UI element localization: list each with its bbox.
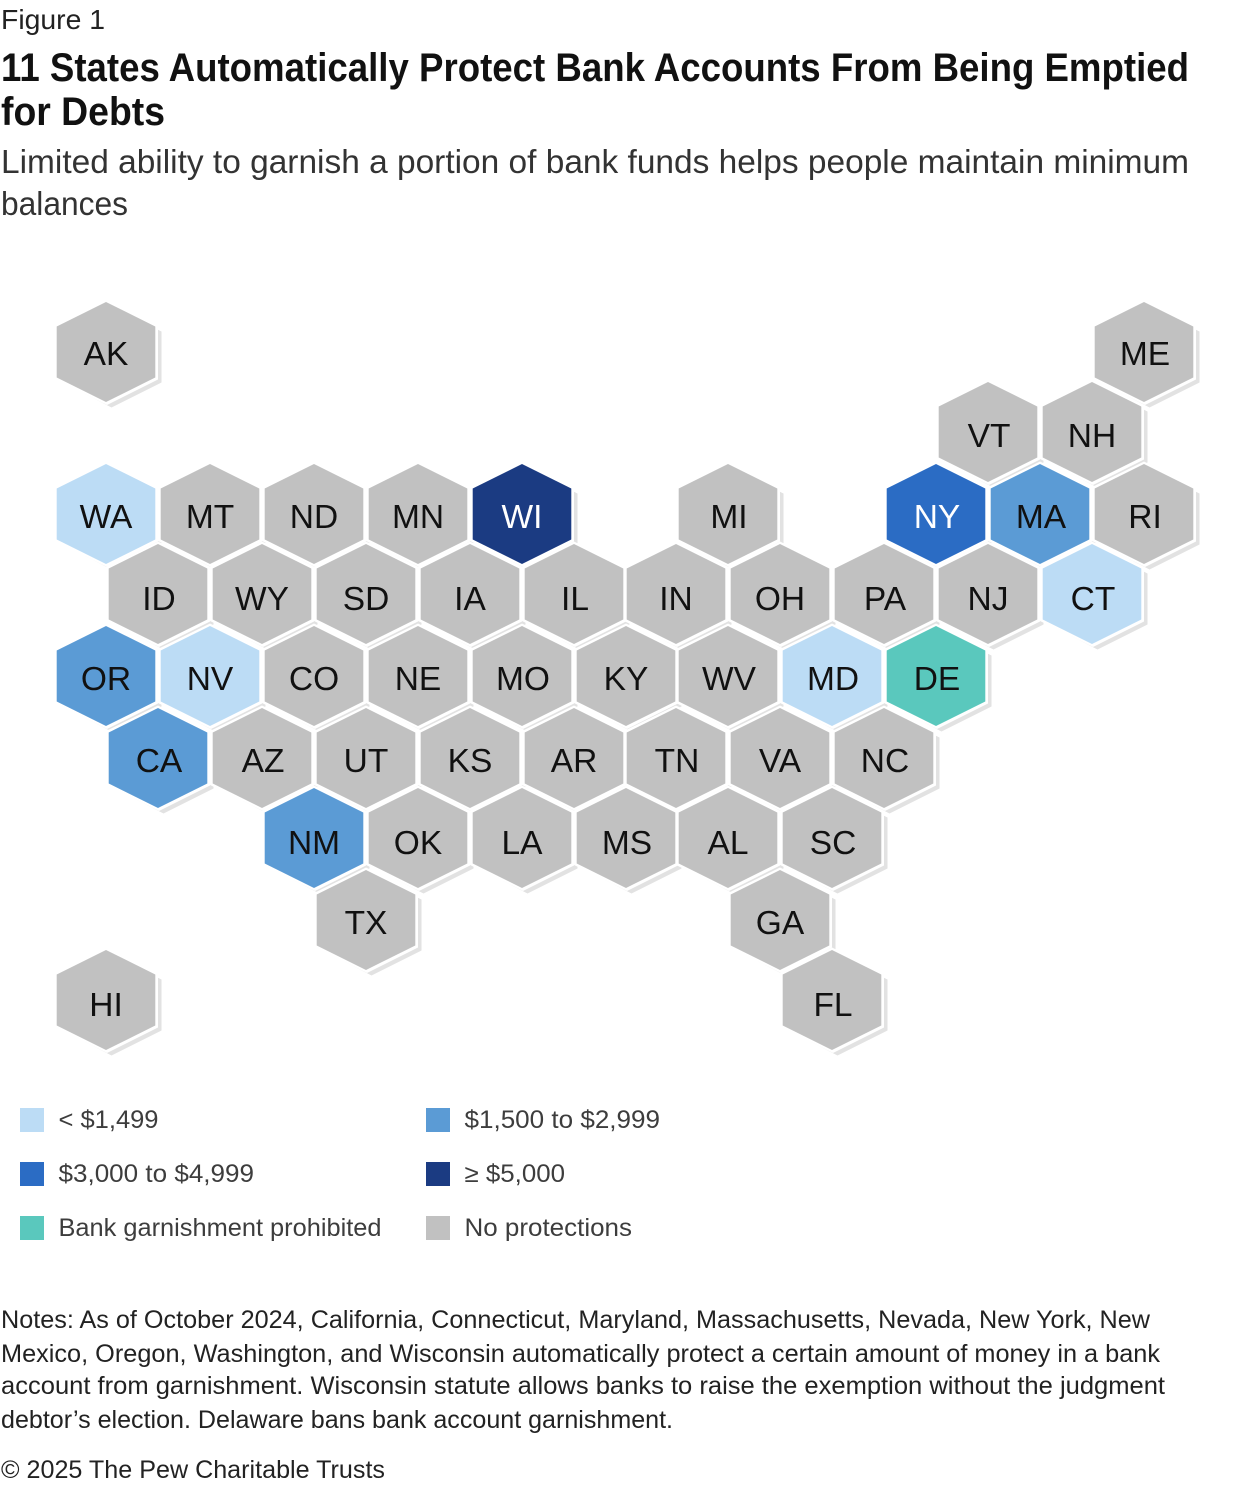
- state: AL: [676, 786, 784, 894]
- title: for Debts: [1, 90, 165, 134]
- notes: account from garnishment. Wisconsin statute allows banks to raise the exemption without the judgment: [1, 1372, 1165, 1400]
- state: CA: [106, 706, 214, 814]
- state: DE: [884, 624, 992, 732]
- state: GA: [728, 868, 836, 976]
- state: WA: [54, 462, 162, 570]
- state: MA: [988, 462, 1096, 570]
- state: NH: [1040, 380, 1148, 488]
- legend item: bank garnishment prohibited: Bank garnishment prohibited: [58, 1214, 382, 1242]
- state: AR: [522, 706, 630, 814]
- state: ID: ID: [142, 581, 176, 618]
- state: MD: [780, 624, 888, 732]
- subtitle: [1, 143, 1189, 222]
- state: IL: IL: [561, 581, 589, 618]
- state: GA: GA: [756, 905, 805, 942]
- legend item: $5,000 or more: ≥ $5,000: [464, 1160, 565, 1188]
- state: MN: [366, 462, 474, 570]
- legend item: $5,000 or more: [426, 1160, 565, 1188]
- state: WI: [470, 462, 578, 570]
- legend item: $1,500 to $2,999: $1,500 to $2,999: [464, 1106, 660, 1134]
- state: OR: [54, 624, 162, 732]
- legend item: under $1,499: < $1,499: [58, 1106, 158, 1134]
- state: IA: IA: [454, 581, 486, 618]
- notes: Mexico, Oregon, Washington, and Wisconsin automatically protect a certain amount of money in a bank: [1, 1340, 1161, 1368]
- state: LA: LA: [502, 825, 543, 862]
- state: SC: [780, 786, 888, 894]
- state: OK: OK: [394, 825, 442, 862]
- state: LA: [470, 786, 578, 894]
- state: MI: [676, 462, 784, 570]
- state: RI: RI: [1128, 499, 1162, 536]
- state: IN: IN: [659, 581, 693, 618]
- state: NH: NH: [1068, 418, 1116, 455]
- state: ND: ND: [290, 499, 338, 536]
- state: NJ: [936, 542, 1044, 650]
- state: KS: [418, 706, 526, 814]
- state: VA: [728, 706, 836, 814]
- state: ND: [262, 462, 370, 570]
- state: MO: [470, 624, 578, 732]
- state: UT: [314, 706, 422, 814]
- state: OR: OR: [81, 661, 131, 698]
- state: NM: [262, 786, 370, 894]
- subtitle: Limited ability to garnish a portion of bank funds helps people maintain minimum: [1, 143, 1189, 180]
- state: MA: MA: [1016, 499, 1067, 536]
- state: CO: [262, 624, 370, 732]
- state: UT: UT: [344, 743, 388, 780]
- state: OH: OH: [755, 581, 805, 618]
- state: PA: PA: [864, 581, 907, 618]
- state: OH: [728, 542, 836, 650]
- legend item: $3,000 to $4,999: $3,000 to $4,999: [58, 1160, 254, 1188]
- title: [1, 46, 1189, 134]
- hexagon map of US states: [54, 300, 1200, 1056]
- state: MS: MS: [602, 825, 652, 862]
- state: ME: [1092, 300, 1200, 408]
- state: IA: [418, 542, 526, 650]
- state: SD: [314, 542, 422, 650]
- state: HI: [54, 948, 162, 1056]
- state: WI: WI: [502, 499, 542, 536]
- copyright: © 2025 The Pew Charitable Trusts: [1, 1456, 385, 1484]
- state: TX: [314, 868, 422, 976]
- state: DE: DE: [914, 661, 960, 698]
- state: AK: AK: [84, 336, 128, 373]
- state: MT: MT: [186, 499, 234, 536]
- state: WV: WV: [702, 661, 757, 698]
- state: IN: [624, 542, 732, 650]
- state: MN: MN: [392, 499, 444, 536]
- state: NV: [158, 624, 266, 732]
- state: ME: ME: [1120, 336, 1170, 373]
- state: MD: MD: [807, 661, 859, 698]
- state: CT: [1040, 542, 1148, 650]
- state: CO: CO: [289, 661, 339, 698]
- state: ID: [106, 542, 214, 650]
- state: TN: TN: [655, 743, 699, 780]
- state: NJ: NJ: [968, 581, 1008, 618]
- state: FL: [780, 948, 888, 1056]
- state: NC: NC: [861, 743, 909, 780]
- state: WV: [676, 624, 784, 732]
- state: WY: WY: [235, 581, 289, 618]
- state: OK: [366, 786, 474, 894]
- state: NM: NM: [288, 825, 340, 862]
- state: AL: AL: [708, 825, 748, 862]
- state: KY: KY: [604, 661, 648, 698]
- state: MS: [574, 786, 682, 894]
- state: TX: TX: [345, 905, 387, 942]
- legend: [20, 1106, 660, 1242]
- state: IL: [522, 542, 630, 650]
- state: NY: [884, 462, 992, 570]
- state: WY: [210, 542, 318, 650]
- state: AZ: AZ: [242, 743, 284, 780]
- state: NC: [832, 706, 940, 814]
- state: MT: [158, 462, 266, 570]
- state: HI: HI: [89, 987, 123, 1024]
- legend item: no protections: No protections: [464, 1214, 632, 1242]
- state: FL: FL: [813, 987, 853, 1024]
- state: PA: [832, 542, 940, 650]
- state: CA: CA: [136, 743, 183, 780]
- state: KY: [574, 624, 682, 732]
- state: SC: SC: [810, 825, 856, 862]
- notes: [1, 1306, 1165, 1434]
- state: RI: [1092, 462, 1200, 570]
- state: NY: NY: [914, 499, 960, 536]
- state: NE: NE: [395, 661, 441, 698]
- state: WA: WA: [80, 499, 133, 536]
- state: TN: [624, 706, 732, 814]
- notes: debtor’s election. Delaware bans bank account garnishment.: [1, 1406, 673, 1434]
- state: MO: MO: [496, 661, 550, 698]
- state: NE: [366, 624, 474, 732]
- state: SD: SD: [343, 581, 389, 618]
- state: AZ: [210, 706, 318, 814]
- state: CT: CT: [1071, 581, 1115, 618]
- notes: Notes: As of October 2024, California, Connecticut, Maryland, Massachusetts, Nevada, New York, New: [1, 1306, 1151, 1334]
- state: VA: VA: [759, 743, 802, 780]
- state: NV: NV: [187, 661, 234, 698]
- state: AK: [54, 300, 162, 408]
- state: KS: KS: [448, 743, 492, 780]
- state: VT: VT: [968, 418, 1010, 455]
- state: VT: [936, 380, 1044, 488]
- figure label: Figure 1: [1, 4, 105, 35]
- subtitle: balances: [1, 185, 128, 222]
- state: MI: MI: [710, 499, 748, 536]
- state: AR: AR: [551, 743, 597, 780]
